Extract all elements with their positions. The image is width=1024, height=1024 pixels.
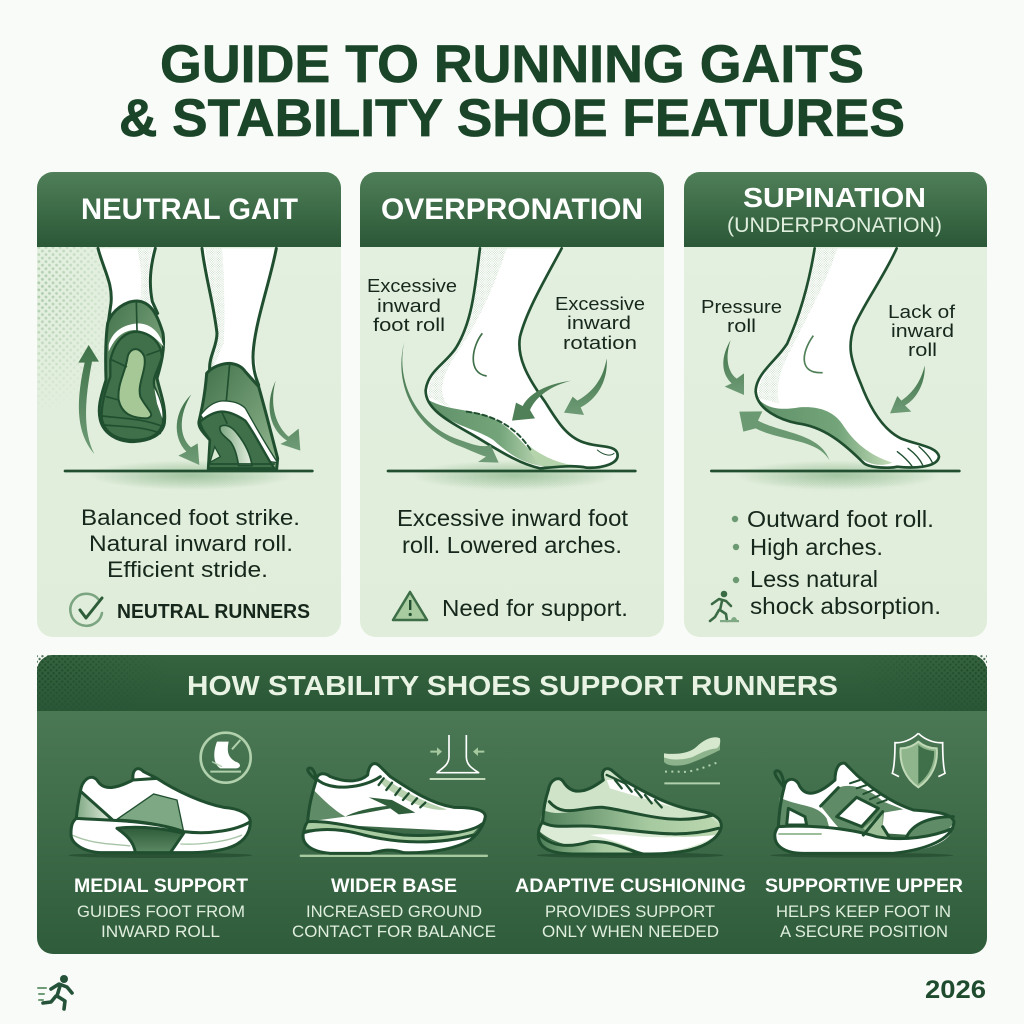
overpronation description: Excessive inward foot bbox=[397, 505, 629, 531]
icon: wider base width arrows bbox=[430, 735, 485, 779]
overpronation description: roll. Lowered arches. bbox=[402, 532, 622, 558]
feature: supportive upper bbox=[765, 733, 963, 941]
adaptive cushioning label: PROVIDES SUPPORT bbox=[545, 902, 715, 921]
feature: adaptive cushioning bbox=[515, 737, 746, 941]
supination header bbox=[684, 172, 987, 247]
neutral runners label: NEUTRAL RUNNERS bbox=[117, 601, 310, 623]
supportive upper label bbox=[765, 876, 963, 941]
panel: supination bbox=[684, 172, 987, 637]
insole bbox=[428, 400, 547, 467]
icon: no-inward-roll foot bbox=[201, 733, 251, 783]
need for support: Need for support. bbox=[442, 595, 628, 621]
medial support label: GUIDES FOOT FROM bbox=[77, 902, 245, 921]
neutral gait description: Balanced foot strike. bbox=[81, 505, 300, 530]
supportive upper label: A SECURE POSITION bbox=[780, 922, 948, 941]
icon: runner on step bbox=[710, 591, 739, 622]
arrow: outward roll bbox=[739, 411, 830, 461]
icon: warning triangle bbox=[393, 592, 427, 620]
supination header: SUPINATION bbox=[743, 182, 926, 213]
supination header: (UNDERPRONATION) bbox=[727, 214, 942, 237]
insole bbox=[758, 398, 892, 465]
title bbox=[119, 35, 905, 148]
icon: shield bbox=[892, 733, 945, 787]
bottom panel header bbox=[37, 655, 987, 711]
footer icon: runner bbox=[38, 975, 72, 1009]
arrow: left of right foot down bbox=[177, 394, 199, 465]
wider base label: INCREASED GROUND bbox=[306, 902, 482, 921]
callout: pressure roll: Pressure bbox=[701, 296, 782, 317]
feature: medial support bbox=[69, 733, 252, 941]
bottom panel header: HOW STABILITY SHOES SUPPORT RUNNERS bbox=[187, 670, 838, 701]
callout: excessive inward foot roll: foot roll bbox=[373, 314, 445, 335]
callout: lack of inward roll: inward bbox=[891, 320, 954, 341]
adaptive cushioning label bbox=[515, 876, 746, 941]
overpronation description bbox=[397, 505, 629, 558]
supination bullet list bbox=[732, 506, 941, 619]
shoe: medial support bbox=[69, 769, 252, 858]
supination bullet list: High arches. bbox=[750, 534, 883, 560]
callout: lack of inward roll: Lack of bbox=[888, 301, 956, 322]
arrow: inward rotation right bbox=[564, 358, 607, 415]
panel: neutral gait bbox=[37, 172, 341, 637]
footer year: 2026 bbox=[925, 976, 986, 1004]
wider base label bbox=[292, 876, 496, 941]
panel: how stability shoes support runners bbox=[37, 655, 987, 954]
callout: excessive inward rotation: Excessive bbox=[555, 293, 645, 314]
wider base label: WIDER BASE bbox=[331, 876, 457, 897]
neutral gait header: NEUTRAL GAIT bbox=[81, 193, 298, 226]
neutral gait description bbox=[81, 505, 300, 582]
callout: excessive inward rotation: rotation bbox=[563, 332, 637, 353]
neutral gait description: Efficient stride. bbox=[107, 557, 268, 582]
neutral gait description: Natural inward roll. bbox=[89, 531, 293, 556]
ground line bbox=[64, 470, 314, 472]
wider base label: CONTACT FOR BALANCE bbox=[292, 922, 496, 941]
callout: excessive inward foot roll: inward bbox=[377, 295, 441, 316]
arrow: pressure roll bbox=[723, 340, 744, 395]
callout: excessive inward foot roll: Excessive bbox=[367, 275, 457, 296]
panel: overpronation bbox=[360, 172, 664, 637]
supportive upper label: HELPS KEEP FOOT IN bbox=[776, 902, 951, 921]
neutral gait header bbox=[37, 172, 341, 247]
medial support label: INWARD ROLL bbox=[101, 922, 220, 941]
adaptive cushioning label: ADAPTIVE CUSHIONING bbox=[515, 876, 746, 897]
icon: cushion layer bbox=[664, 737, 720, 783]
illustration: supinating foot bbox=[710, 248, 961, 493]
ground line bbox=[387, 470, 637, 472]
arrow: lack of inward roll bbox=[890, 366, 925, 413]
feature: wider base bbox=[292, 735, 496, 941]
shoe: wider base bbox=[300, 764, 488, 857]
ground line bbox=[710, 470, 961, 472]
title: GUIDE TO RUNNING GAITS bbox=[160, 35, 864, 94]
medial support label: MEDIAL SUPPORT bbox=[74, 876, 248, 897]
supination bullet list: shock absorption. bbox=[750, 593, 941, 619]
illustration: overpronating foot bbox=[387, 248, 637, 493]
overpronation header: OVERPRONATION bbox=[381, 193, 643, 226]
title: & STABILITY SHOE FEATURES bbox=[119, 89, 905, 148]
icon: check mark bbox=[70, 594, 102, 626]
left shoe sole bbox=[99, 301, 165, 442]
callout: excessive inward rotation bbox=[555, 293, 645, 353]
right shoe sole bbox=[199, 363, 278, 469]
illustration: two feet in stride bbox=[64, 248, 314, 490]
supportive upper label: SUPPORTIVE UPPER bbox=[765, 876, 963, 897]
callout: excessive inward foot roll bbox=[367, 275, 457, 335]
supination bullet list: Less natural bbox=[750, 566, 878, 592]
callout: pressure roll bbox=[701, 296, 782, 336]
callout: pressure roll: roll bbox=[727, 315, 756, 336]
supination bullet list: Outward foot roll. bbox=[747, 506, 934, 532]
overpronation header bbox=[360, 172, 664, 247]
arrow: inward rotation middle bbox=[512, 381, 571, 421]
medial support label bbox=[74, 876, 248, 941]
shoe: adaptive cushioning bbox=[537, 769, 723, 858]
callout: lack of inward roll bbox=[888, 301, 956, 360]
arrow: left foot lifts up bbox=[78, 345, 99, 454]
shoe: supportive upper bbox=[770, 763, 954, 858]
callout: excessive inward rotation: inward bbox=[567, 312, 631, 333]
callout: lack of inward roll: roll bbox=[908, 339, 937, 360]
adaptive cushioning label: ONLY WHEN NEEDED bbox=[542, 922, 719, 941]
arrow: right of right foot down bbox=[270, 381, 300, 451]
arrow: foot roll bbox=[401, 342, 499, 463]
